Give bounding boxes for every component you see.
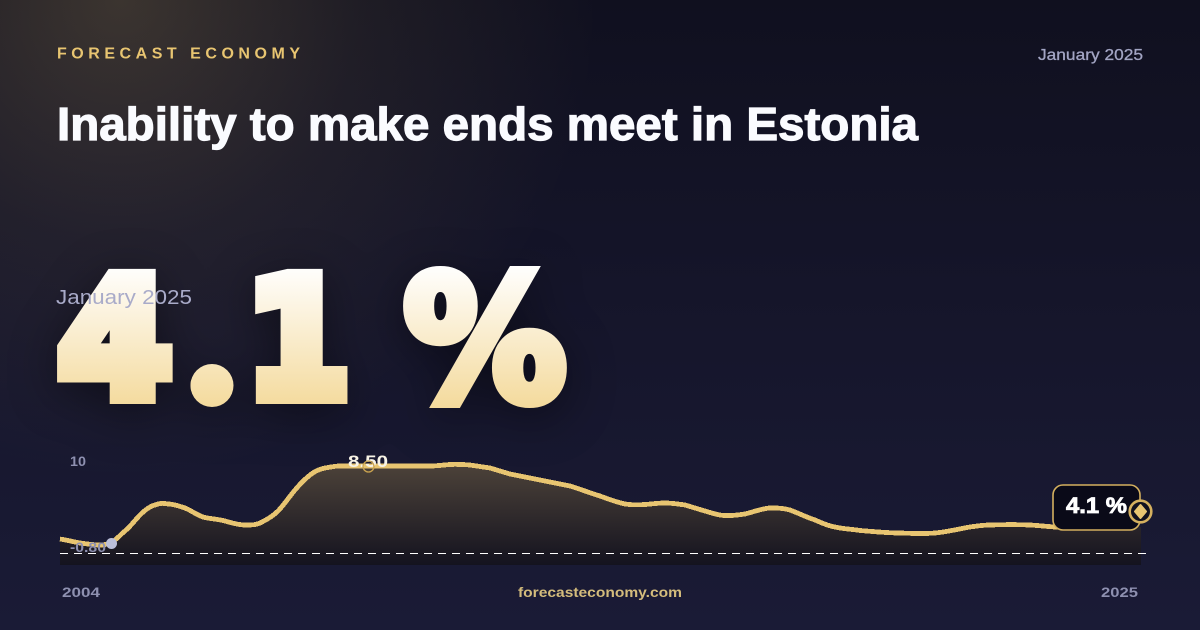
big value [56, 266, 567, 420]
big value: 4 [58, 246, 172, 434]
brand heading: FORECAST ECONOMY [57, 46, 300, 62]
end year: 2025 [1101, 584, 1138, 600]
chart area [60, 464, 1141, 565]
zero baseline [60, 552, 1147, 554]
latest value callout: 4.1 % [1066, 493, 1127, 518]
date over value: January 2025 [56, 287, 192, 309]
peak label: 8.50 [348, 452, 388, 471]
latest marker [1130, 501, 1151, 522]
date top right: January 2025 [1038, 47, 1143, 64]
minimum marker [106, 538, 117, 549]
y axis max label: 10 [70, 453, 86, 469]
big value: % [404, 241, 566, 441]
chart line [60, 464, 1090, 545]
title: Inability to make ends meet in Estonia [57, 98, 918, 150]
big value: . [160, 152, 266, 478]
line chart [60, 452, 1151, 565]
big value: 1 [246, 246, 350, 434]
website: forecasteconomy.com [518, 584, 682, 600]
y axis min label: -0.80 [70, 539, 106, 555]
start year: 2004 [62, 584, 100, 600]
latest value callout [1053, 485, 1140, 530]
peak marker [363, 461, 374, 472]
